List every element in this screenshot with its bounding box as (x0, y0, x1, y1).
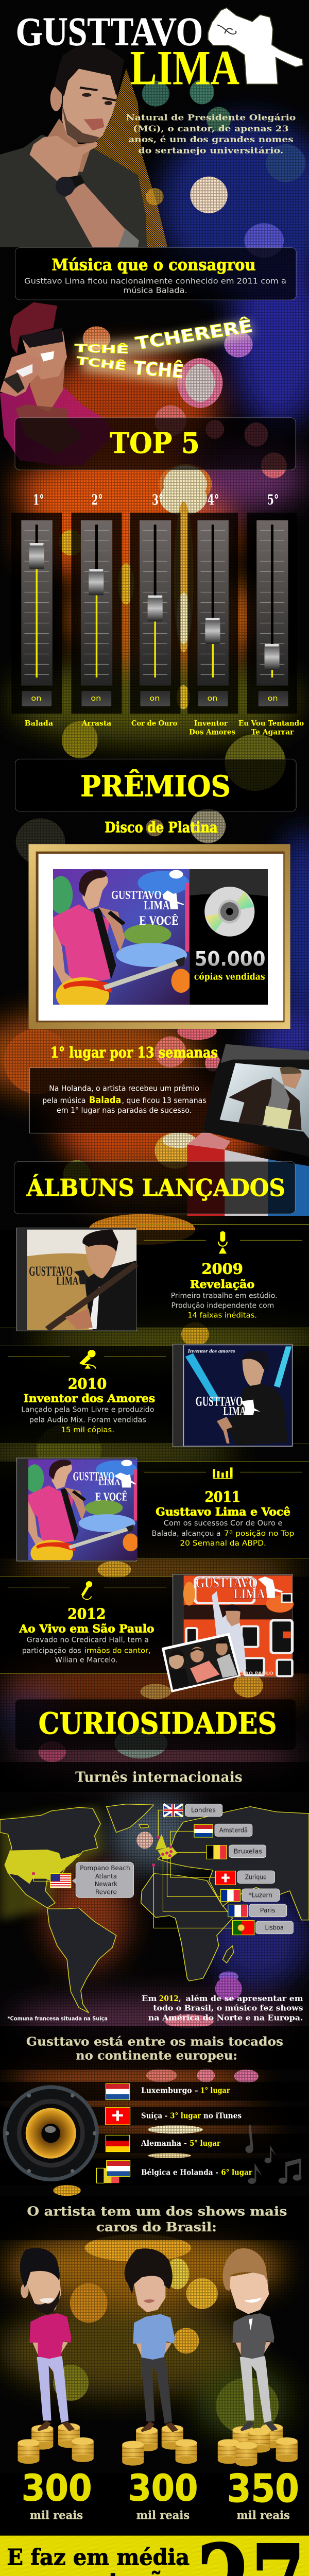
band: shows mais caros heading: O artista tem um dos shows mais (27, 2205, 287, 2219)
panel sheen (190, 869, 268, 896)
flag: USA and cities label: Revere (95, 1889, 117, 1896)
band: europa heading: Gusttavo está entre os mais tocados (26, 2034, 283, 2048)
text: 2012 Ao Vivo em São Paulo: Gravado no Credicard Hall, tem a (27, 1636, 149, 1644)
text: 2010 Inventor dos Amores (21, 1375, 155, 1434)
frame inner edge (36, 852, 285, 1022)
icon: equalizer (213, 1467, 233, 1479)
panel: Holanda award text: Na Holanda, o artista recebeu um prêmio (49, 1083, 199, 1093)
album case: 2010 Inventor dos Amores: Inventor dos amores (187, 1349, 235, 1354)
fader 4: Inventor Dos Amores: Inventor (194, 719, 228, 727)
row: Bélgica e Holanda (96, 2161, 252, 2183)
chant text: tchê tchererê (74, 316, 254, 356)
heading: 1° lugar por 13 semanas: 1° lugar por 13 semanas (50, 1044, 218, 1061)
row: Suíça: 3° lugar (170, 2111, 201, 2120)
fader 1: Balada (11, 492, 62, 727)
fee: 300 mil reais (Gusttavo) (22, 2466, 92, 2522)
text: 2011 Gusttavo Lima e Você (152, 1488, 294, 1548)
fader 5: Eu Vou Tentando Te Agarrar: Te Agarrar (251, 728, 294, 736)
text: 2011 Gusttavo Lima e Você: Gusttavo Lima e Você (156, 1505, 290, 1518)
row: Luxemburgo: 1° lugar (200, 2086, 230, 2095)
chant text: tchê tchê: TCHÊ (132, 357, 185, 383)
highlighted UK and France (156, 1834, 177, 1859)
text: 2012 Ao Vivo em São Paulo: irmãos do cantor, (84, 1646, 151, 1655)
panel: Holanda award text (29, 1068, 221, 1133)
flag: France and Paris label: Paris (260, 1907, 276, 1914)
panel: prêmios heading (15, 759, 296, 811)
band: shows mais caros heading (0, 2196, 309, 2240)
album case: 2011 Gusttavo Lima e Você: E VOCÊ (95, 1490, 128, 1503)
singer with sunglasses and microphone (0, 302, 116, 465)
flag: Switzerland and Zurique label: Zurique (245, 1874, 267, 1881)
dark band 2009 (0, 1230, 309, 1328)
panel: Holanda award text: em 1° lugar nas paradas de sucesso. (57, 1106, 192, 1115)
caricature: Luan Santana on coins (122, 2248, 197, 2466)
digital photo frame (204, 1044, 309, 1157)
description (24, 277, 286, 295)
row: Suíça (106, 2108, 242, 2125)
panel: Holanda award text: Balada (89, 1094, 121, 1106)
flag: France and Paris label (228, 1904, 287, 1917)
sales number: 50.000 (195, 947, 265, 971)
panel: prêmios heading: PRÊMIOS (80, 769, 231, 803)
fader 3: Cor de Ouro: on (149, 694, 160, 703)
band: shows mais caros heading: caros do Brasil: (96, 2221, 217, 2234)
album cover artwork: LIMA (144, 899, 169, 912)
text: 2012 Ao Vivo em São Paulo: Ao Vivo em São Paulo (19, 1622, 154, 1635)
flag: France and Luzern label: *Luzern (249, 1892, 272, 1899)
continents (0, 1804, 309, 2013)
caricature: Michel Teló on coins (218, 2248, 298, 2466)
framed platinum record (28, 844, 290, 1029)
panel: top 5 heading: TOP 5 (110, 426, 200, 460)
text: 2011 Gusttavo Lima e Você: 2011 (205, 1488, 241, 1505)
text: 2010 Inventor dos Amores: pela Audio Mix. Foram vendidas (29, 1416, 146, 1424)
fee: 300 mil reais (Luan) (128, 2466, 198, 2522)
fader 1: Balada: Balada (25, 719, 53, 727)
row: Alemanha: 5° lugar (190, 2139, 220, 2148)
album case: 2009 Revelação (17, 1228, 136, 1331)
album case: 2011 Gusttavo Lima e Você: GUSTTAVO (73, 1469, 114, 1483)
row: Bélgica e Holanda: Bélgica e Holanda - (141, 2168, 218, 2177)
fader 2: Arrasta: Arrasta (81, 719, 111, 727)
flag: USA and cities label: Atlanta (95, 1873, 117, 1880)
fader 2: Arrasta (72, 492, 122, 727)
text: 2010 Inventor dos Amores: Lançado pela Som Livre e produzido (21, 1405, 154, 1414)
map footnote: *Comuna francesa situada na Suíça (8, 2015, 108, 2022)
fader 5: Eu Vou Tentando Te Agarrar: on (268, 694, 278, 703)
row: Bélgica e Holanda: 6° lugar (221, 2168, 252, 2177)
panel: top 5 heading (15, 418, 296, 470)
text: 2011 Gusttavo Lima e Você: Com os sucessos Cor de Ouro e (164, 1519, 283, 1528)
logo: GUSTTAVO: GUSTTAVO (16, 10, 203, 54)
flag: Portugal and Lisboa label: Lisboa (265, 1924, 284, 1931)
flag: Portugal and Lisboa label (233, 1921, 293, 1935)
heading: disco de platina: Disco de Platina (105, 819, 218, 836)
flag: USA and cities label (50, 1862, 133, 1897)
flag: UK and Londres label: Londres (191, 1807, 216, 1814)
highlighted USA (4, 1850, 81, 1884)
fee: 300 mil reais (Gusttavo): 300 (22, 2466, 92, 2509)
dark band 2011 (0, 1462, 309, 1558)
icon: microphone on stand (80, 1350, 96, 1369)
band: turnês internacionais (0, 1762, 309, 1792)
band: turnês internacionais: Turnês internacionais (75, 1768, 243, 1785)
flag: Netherlands and Amsterdã label: Amsterdã (219, 1827, 248, 1834)
intro paragraph (126, 113, 296, 156)
yellow band: 27 apresentações por mês: E faz em média (7, 2544, 190, 2570)
text: 2011 Gusttavo Lima e Você: 7ª posição no Top (224, 1529, 294, 1538)
loudspeaker (3, 2085, 99, 2181)
album case: 2012 Ao Vivo em São Paulo (173, 1574, 294, 1677)
fader 2: Arrasta: on (91, 694, 101, 703)
fee: 300 mil reais (Gusttavo): mil reais (30, 2508, 83, 2522)
row: Suíça: no iTunes (203, 2111, 242, 2120)
text: 2012 Ao Vivo em São Paulo: participação dos (22, 1646, 81, 1655)
intro paragraph: (MG), o cantor, de apenas 23 (133, 124, 289, 134)
flag: UK and Londres label (164, 1804, 222, 1817)
text: 2009 Revelação: 14 faixas inéditas. (187, 1311, 257, 1319)
row: Luxemburgo: Luxemburgo – (141, 2086, 198, 2095)
fader 2: Arrasta: 2° (92, 492, 103, 508)
map glow (0, 1807, 102, 1920)
album case: 2012 Ao Vivo em São Paulo: LIMA (233, 1586, 265, 1602)
description: música Balada. (123, 286, 187, 295)
gold frame (28, 844, 290, 1029)
caricature: Gusttavo Lima on coins (18, 2248, 94, 2464)
fader 4: Inventor Dos Amores: on (207, 694, 218, 703)
yellow band: 27 apresentações por mês (0, 2520, 309, 2576)
chant text: tchê tchê: TCHÊ (75, 353, 127, 373)
album case: 2011 Gusttavo Lima e Você: LIMA (98, 1477, 120, 1487)
fee: 350 mil reais (Teló): mil reais (237, 2508, 290, 2522)
fee: 300 mil reais (Luan): 300 (128, 2466, 198, 2509)
panel: Holanda award text: , que ficou 13 semanas (122, 1096, 207, 1105)
fader 3: Cor de Ouro: 3° (152, 492, 163, 508)
band rule (0, 1327, 309, 1329)
icon: retro microphone (218, 1231, 227, 1253)
album cover artwork: GUSTTAVO (111, 888, 162, 902)
album cover artwork: E VOCÊ (139, 914, 178, 928)
fader 1: Balada: on (31, 694, 41, 703)
chant text: tchê tchererê: TCHÊ (74, 341, 129, 356)
text: 2009 Revelação: Produção independente com (171, 1301, 274, 1310)
fader 5: Eu Vou Tentando Te Agarrar (238, 492, 304, 736)
fader 3: Cor de Ouro (130, 492, 181, 727)
decorative rule 2012 (8, 1586, 166, 1588)
dark band 2010 (0, 1346, 309, 1444)
band rule (0, 1346, 309, 1444)
flag: Netherlands and Amsterdã label (194, 1824, 252, 1837)
text: 2010 Inventor dos Amores: 2010 (68, 1375, 107, 1393)
tour summary text: 2012, (159, 1994, 181, 2003)
fader 1: Balada: 1° (33, 492, 44, 508)
white mat (39, 854, 283, 1021)
city dots (32, 1836, 173, 1875)
panel: música que o consagrou (15, 248, 296, 300)
chant text: tchê tchê (75, 353, 185, 383)
platinum CD (204, 887, 254, 937)
flag: USA and cities label: Newark (95, 1881, 117, 1888)
decorative rule 2011 (144, 1471, 302, 1473)
world map (0, 1804, 309, 2013)
album case: 2009 Revelação: GUSTTAVO (29, 1264, 73, 1279)
black sales panel (190, 869, 268, 1005)
flag: USA and cities label: Pompano Beach (80, 1865, 130, 1872)
album case: 2012 Ao Vivo em São Paulo: SÃO PAULO (241, 1671, 273, 1676)
album case: 2009 Revelação: LIMA (56, 1275, 78, 1287)
flag: Switzerland and Zurique label (216, 1871, 274, 1885)
row: Luxemburgo (106, 2083, 230, 2100)
panel: álbuns lançados heading (14, 1161, 295, 1214)
album cover artwork (49, 869, 191, 1013)
row: Suíça: Suíça - (141, 2111, 167, 2120)
text: 2009 Revelação (171, 1261, 277, 1319)
album case: 2010 Inventor dos Amores: GUSTTAVO (196, 1394, 243, 1409)
decorative rule 2009 (136, 1225, 309, 1240)
flag: Belgium and Bruxelas label: Bruxelas (234, 1848, 262, 1855)
row: Alemanha: Alemanha - (141, 2139, 187, 2148)
album case: 2011 Gusttavo Lima e Você (17, 1458, 139, 1567)
fader 3: Cor de Ouro: Cor de Ouro (131, 719, 177, 727)
text: 2012 Ao Vivo em São Paulo: 2012 (67, 1605, 106, 1622)
chant text: tchê tchererê: TCHERERÊ (134, 316, 254, 354)
text: 2009 Revelação: Primeiro trabalho em estúdio. (171, 1291, 277, 1300)
band rules (0, 1577, 173, 1673)
text: 2009 Revelação: 2009 (201, 1261, 243, 1278)
flag: France and Luzern label (221, 1889, 280, 1902)
glow behind chant text (79, 328, 250, 378)
panel: curiosidades heading (15, 1699, 296, 1750)
dark band 2012 (0, 1577, 309, 1673)
halftone stripes behind portrait (93, 69, 167, 247)
intro paragraph: anos, é um dos grandes nomes (128, 135, 294, 145)
dark rows (0, 2082, 309, 2185)
connector lines (33, 1810, 233, 1928)
flag cube under photo frame (187, 1131, 309, 1216)
tour summary text: Em (142, 1994, 157, 2003)
band rule (136, 1461, 309, 1462)
album case: 2010 Inventor dos Amores: LIMA (223, 1405, 246, 1418)
icon: handheld microphone (82, 1581, 92, 1599)
panel: Holanda award text: pela música (42, 1096, 85, 1105)
band rule (136, 1558, 309, 1560)
tilted photo of the brothers (162, 1633, 241, 1692)
description: Gusttavo Lima ficou nacionalmente conhecido em 2011 com a (24, 277, 286, 285)
fader 4: Inventor Dos Amores (187, 492, 238, 736)
text: 2010 Inventor dos Amores: 15 mil cópias. (61, 1426, 114, 1434)
tour summary text (142, 1994, 303, 2022)
music notes (245, 2124, 301, 2184)
fader 4: Inventor Dos Amores: 4° (208, 492, 219, 508)
logo: hat and guitar silhouette (208, 8, 303, 84)
band: europa heading: no continente europeu: (76, 2048, 237, 2062)
logo: LIMA: LIMA (130, 41, 239, 95)
portrait of Gusttavo Lima (0, 41, 147, 247)
text: 2010 Inventor dos Amores: Inventor dos Amores (24, 1392, 155, 1405)
fee: 300 mil reais (Luan): mil reais (136, 2508, 190, 2522)
album case: 2012 Ao Vivo em São Paulo: GUSTTAVO (196, 1575, 258, 1591)
album case: 2010 Inventor dos Amores (173, 1344, 292, 1447)
intro paragraph: do sertanejo universitário. (138, 146, 283, 156)
text: 2012 Ao Vivo em São Paulo (19, 1605, 154, 1664)
fader 4: Inventor Dos Amores: Dos Amores (189, 728, 235, 736)
row: Alemanha (106, 2135, 220, 2152)
heading: música: Música que o consagrou (52, 256, 255, 274)
band: europa heading (0, 2026, 309, 2070)
decorative rule 2010 (8, 1356, 166, 1358)
text: 2011 Gusttavo Lima e Você: Balada, alcançou a (152, 1529, 221, 1538)
text: 2009 Revelação: Revelação (190, 1278, 254, 1291)
flag: Belgium and Bruxelas label (207, 1845, 266, 1859)
sales caption: cópias vendidas (194, 972, 265, 982)
black band behind fees (0, 2473, 309, 2536)
text: 2011 Gusttavo Lima e Você: 20 Semanal da ABPD. (180, 1539, 266, 1548)
fader 5: Eu Vou Tentando Te Agarrar: 5° (267, 492, 279, 508)
intro paragraph: Natural de Presidente Olegário (126, 113, 296, 123)
text: 2012 Ao Vivo em São Paulo: Wilian e Marcelo. (55, 1656, 117, 1664)
